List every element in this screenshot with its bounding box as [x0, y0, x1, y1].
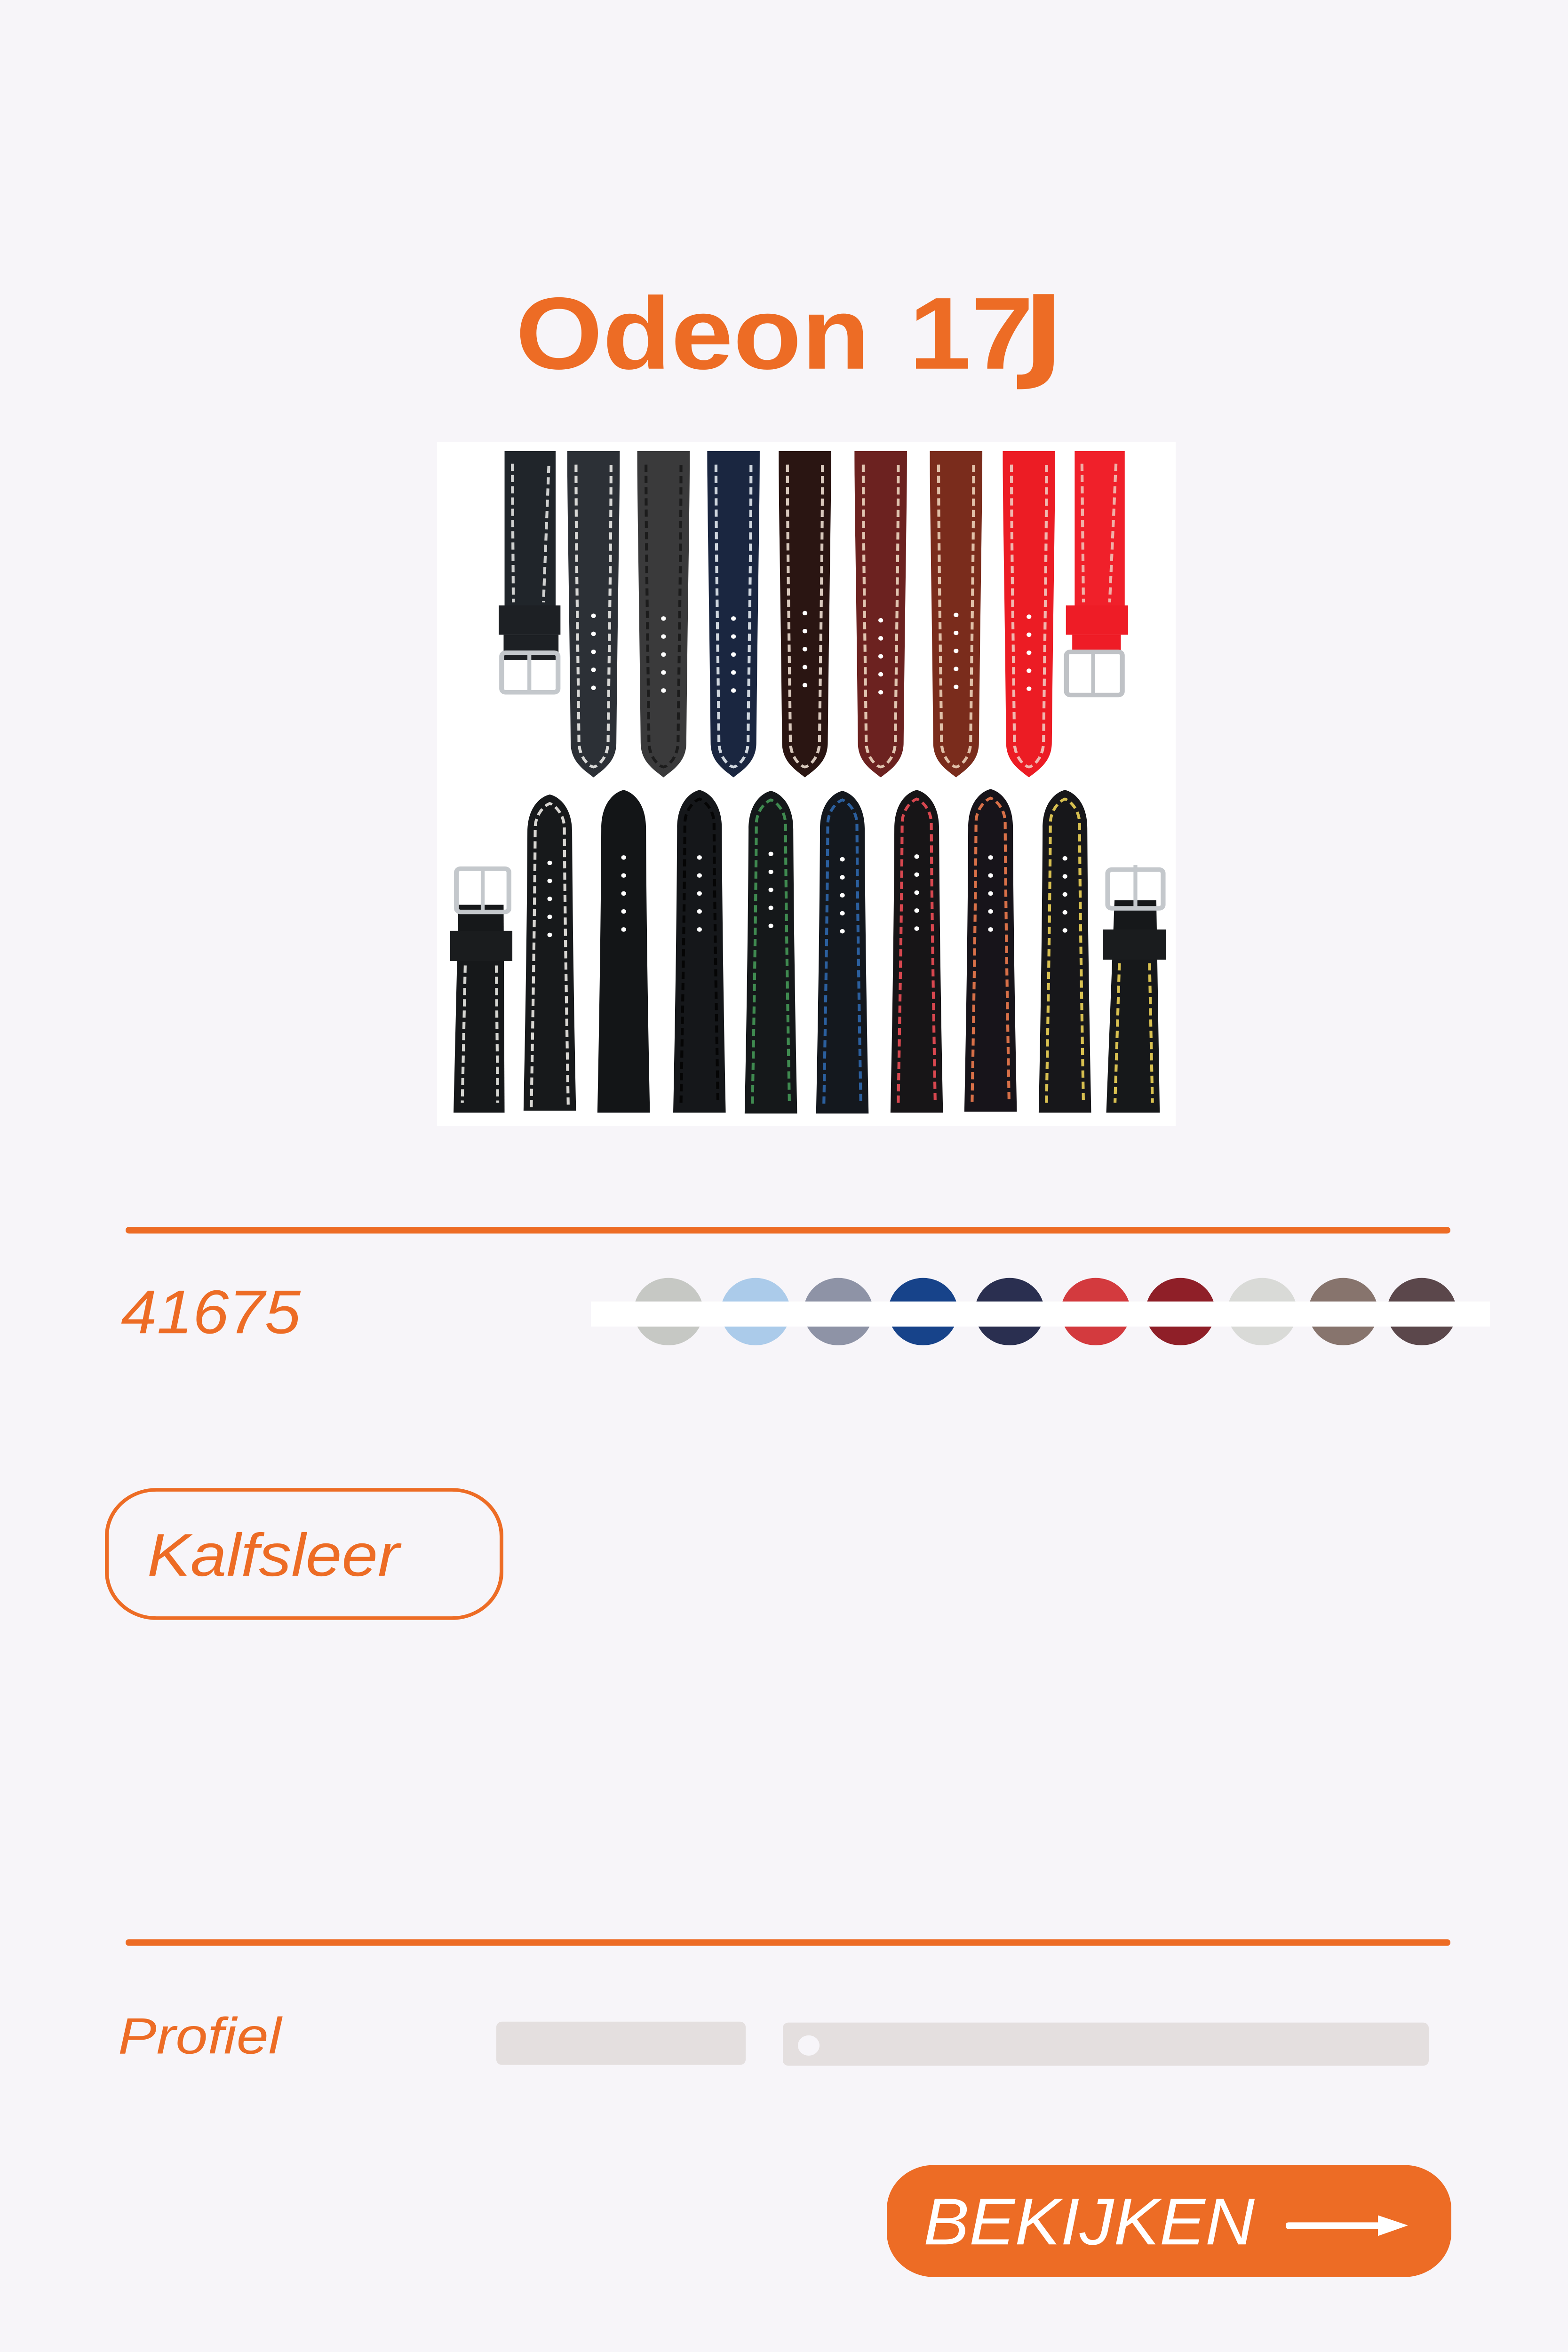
button label: BEKIJKEN — [923, 2185, 1255, 2258]
bottom row: yellow stitched strap — [1039, 790, 1091, 1112]
top row: red strap — [1003, 451, 1055, 778]
top divider — [126, 1227, 1450, 1233]
bottom row: black stitched strap — [673, 790, 726, 1112]
top row: slate strap — [567, 451, 620, 778]
white band across swatches — [591, 1302, 1490, 1327]
button: bekijken — [887, 2165, 1451, 2277]
top row: red strap with buckle — [1066, 451, 1128, 697]
bottom row: plain black strap — [597, 790, 650, 1112]
title: Odeon — [516, 276, 870, 390]
bottom row: green stitched strap — [745, 791, 797, 1113]
top row: burgundy strap — [854, 451, 907, 778]
top row: grey strap — [637, 451, 690, 778]
material label: Kalfsleer — [147, 1522, 402, 1589]
icon: arrow — [1286, 2215, 1408, 2236]
top row: dark brown strap — [779, 451, 831, 778]
bottom row: black strap with buckle, left — [450, 868, 512, 1112]
top row: navy strap — [707, 451, 760, 778]
product image: watch straps — [437, 442, 1176, 1126]
bottom row: blue stitched strap — [816, 791, 868, 1113]
bottom row: red stitched strap — [891, 790, 943, 1112]
article number: 41675 — [121, 1277, 301, 1346]
top row: black strap with buckle — [499, 451, 560, 694]
bottom row: black strap with buckle, right — [1103, 865, 1166, 1112]
profile shape: long segment with hole — [783, 2023, 1429, 2066]
title: J — [1017, 274, 1064, 393]
material tag — [107, 1490, 501, 1618]
profile label: Profiel — [118, 2007, 283, 2064]
title: 17 — [909, 276, 1034, 390]
bottom row: white stitched strap — [524, 795, 576, 1111]
top row: cognac strap — [930, 451, 982, 778]
bottom divider — [126, 1939, 1450, 1946]
profile shape: short segment — [496, 2022, 746, 2065]
colour swatches — [591, 1278, 1490, 1345]
bottom row: orange stitched strap — [964, 789, 1017, 1112]
